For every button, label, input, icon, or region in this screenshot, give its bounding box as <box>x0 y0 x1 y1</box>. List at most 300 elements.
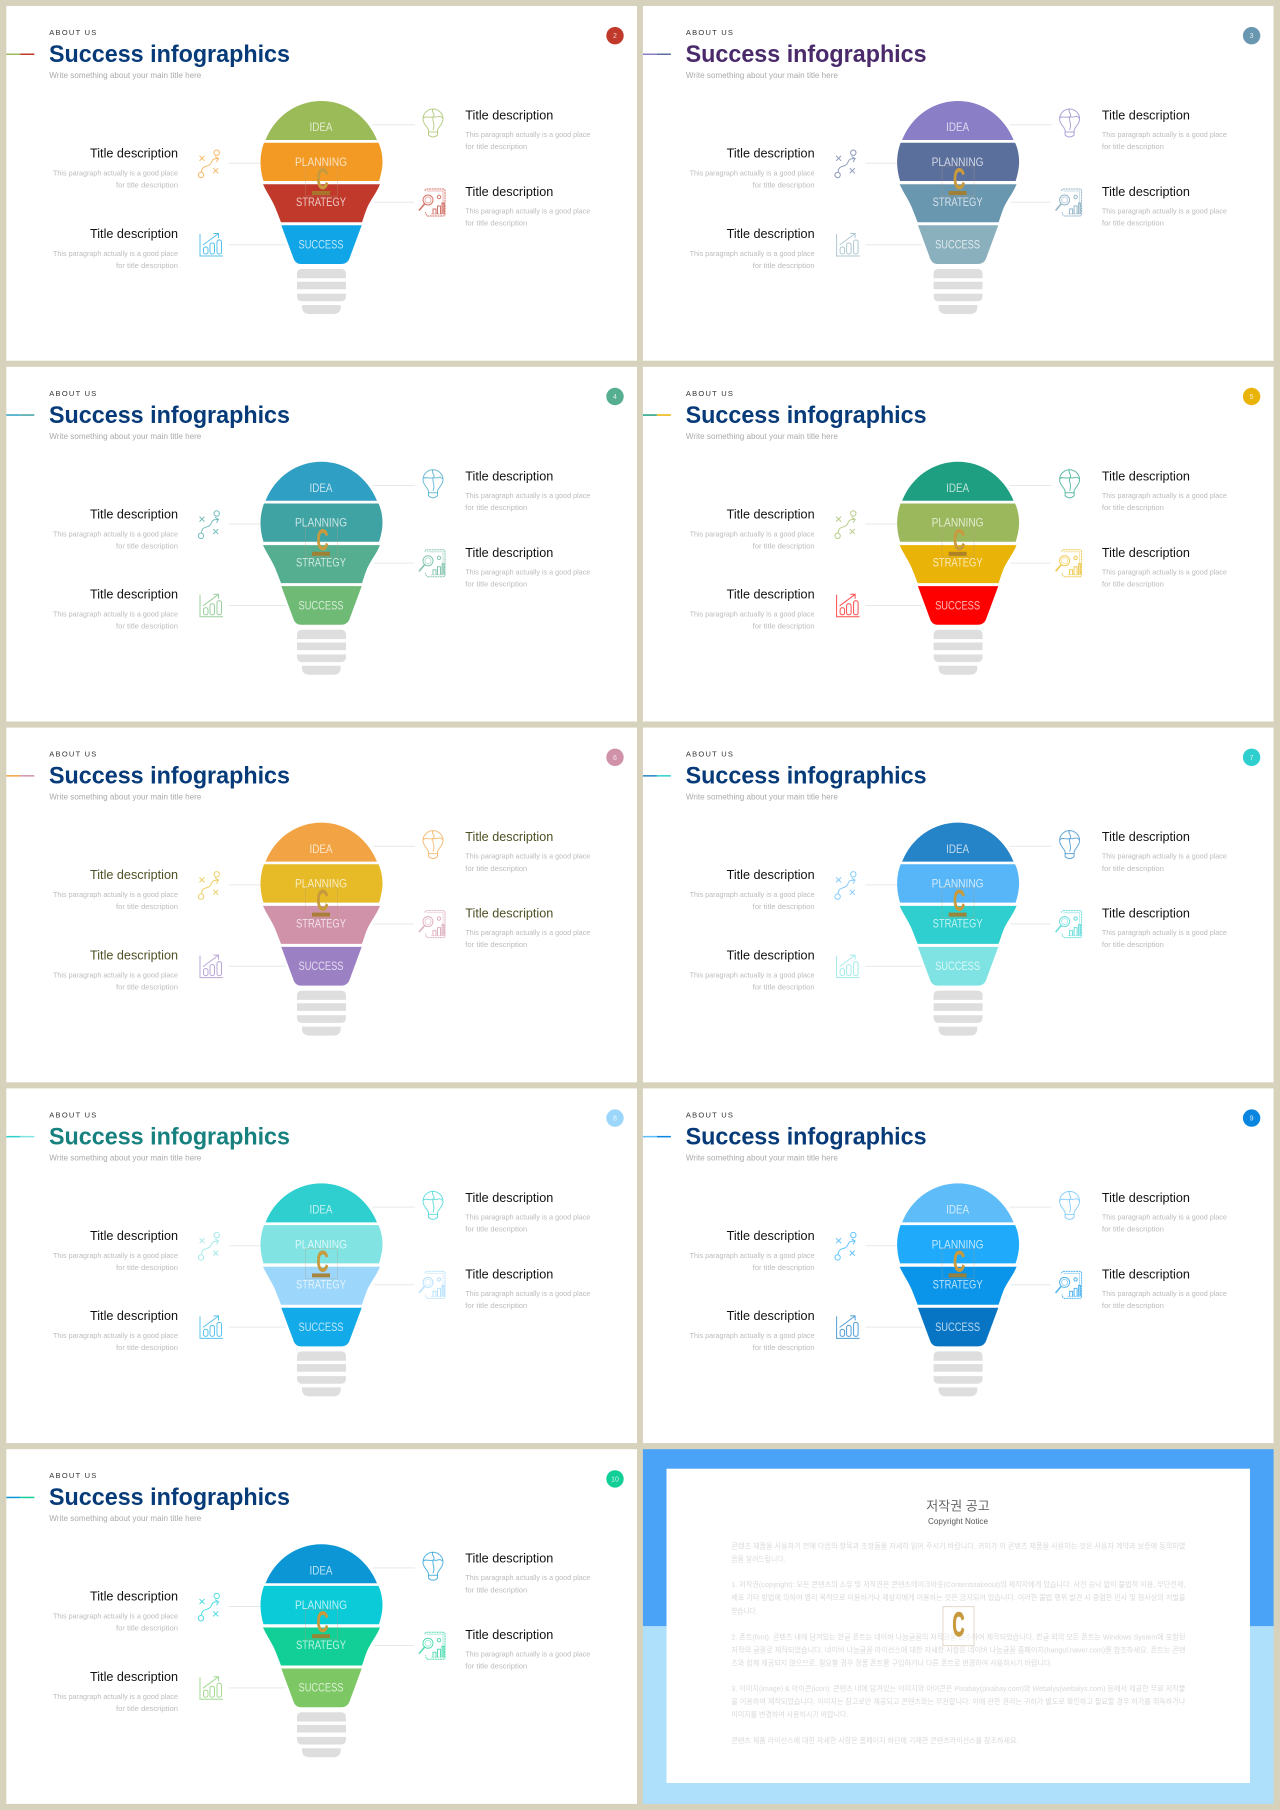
text block: right top: This paragraph actually is a good place <box>465 491 590 500</box>
text block: left top: for title description <box>753 902 815 911</box>
eyebrow: ABOUT US <box>49 28 96 37</box>
labels: IDEA <box>946 1203 969 1217</box>
eyebrow: ABOUT US <box>686 1110 733 1119</box>
icon: strategy play <box>198 150 219 178</box>
text block: left bottom: Title description <box>90 1308 178 1323</box>
bulb base <box>934 1351 983 1396</box>
text block: right top: This paragraph actually is a good place <box>465 130 590 139</box>
text block: left top: for title description <box>116 541 178 550</box>
labels: STRATEGY <box>296 1638 346 1652</box>
text block: right bottom: This paragraph actually is a good place <box>1102 1289 1227 1298</box>
text block: right top: This paragraph actually is a good place <box>1102 491 1227 500</box>
panel: slide 7 <box>643 728 1274 1082</box>
text block: left top <box>53 1589 178 1633</box>
light bulb diagram <box>897 823 1019 1036</box>
text block: left bottom <box>53 947 178 991</box>
panel: slide 4 <box>6 367 637 722</box>
light bulb diagram <box>897 101 1019 314</box>
notice body text: 3. 이미지(image) & 아이콘(icon): 콘텐츠 내에 담겨있는 이미지와 아이콘은 Pixabay(pixabay.com)와 Webalys(webalys.com) 등에서 제공한 무료 저작물 <box>731 1683 1185 1693</box>
watermark: C <box>953 1245 965 1278</box>
page number badge: 4 <box>613 394 617 401</box>
text block: right bottom: for title description <box>465 218 527 228</box>
watermark: C <box>316 885 328 918</box>
text block: left top: This paragraph actually is a good place <box>53 890 178 899</box>
text block: left bottom: for title description <box>753 622 815 631</box>
eyebrow: ABOUT US <box>49 1110 96 1119</box>
text block: left bottom: This paragraph actually is a good place <box>53 249 178 258</box>
labels: PLANNING <box>932 1237 984 1251</box>
watermark: C <box>953 524 965 557</box>
labels: SUCCESS <box>298 1320 344 1334</box>
watermark: C <box>953 163 965 196</box>
labels <box>932 1203 984 1334</box>
accent line <box>6 1497 34 1498</box>
accent line <box>6 414 34 416</box>
text block: right top: for title description <box>465 864 527 873</box>
text block: left top: Title description <box>727 867 815 882</box>
labels <box>295 842 347 973</box>
labels: STRATEGY <box>933 195 983 209</box>
text block: right top <box>1102 468 1227 512</box>
labels: STRATEGY <box>296 1277 346 1291</box>
watermark <box>943 1606 974 1646</box>
icon: strategy play <box>835 150 856 178</box>
icon: strategy play <box>198 1232 219 1260</box>
text block: right top: Title description <box>465 1551 553 1566</box>
page number badge <box>606 1109 624 1127</box>
text block: left top: Title description <box>90 867 178 882</box>
notice body text: 콘텐츠 제품 라이선스에 대한 자세한 사항은 홈페이지 하단에 기재한 콘텐츠라이선스를 참조하세요. <box>731 1735 1018 1745</box>
text block: right top: This paragraph actually is a good place <box>1102 130 1227 139</box>
segment: idea <box>266 101 377 140</box>
panel: copyright notice <box>643 1449 1274 1804</box>
icon: strategy play <box>835 1232 856 1260</box>
text block: right bottom: This paragraph actually is a good place <box>465 928 590 937</box>
icon: report magnifier <box>1056 550 1082 577</box>
watermark: C <box>316 163 328 196</box>
labels: SUCCESS <box>298 959 344 973</box>
notice body text: 저작의 글꼴로 제작되었습니다. 네이버 나눔글꼴 라이선스에 대한 자세한 사항은 네이버 나눔글꼴 홈페이지(hangul.naver.com)를 참조하세요. 폰트는 콘텐 <box>731 1644 1185 1654</box>
text block: left bottom: This paragraph actually is a good place <box>53 610 178 619</box>
text block: left bottom <box>53 587 178 631</box>
watermark <box>306 163 338 196</box>
labels: IDEA <box>310 842 332 856</box>
labels: SUCCESS <box>298 598 344 612</box>
page number badge: 9 <box>1250 1116 1254 1123</box>
segment: idea <box>902 1183 1014 1222</box>
text block: left bottom: This paragraph actually is a good place <box>690 1331 815 1340</box>
title: Success infographics <box>49 402 290 429</box>
labels: IDEA <box>946 842 969 856</box>
eyebrow: ABOUT US <box>49 1471 96 1480</box>
text block: right bottom: Title description <box>1102 1266 1190 1281</box>
eyebrow: ABOUT US <box>686 389 733 398</box>
text block: left top <box>53 506 178 550</box>
text block: left top: for title description <box>116 1263 178 1272</box>
labels: IDEA <box>310 1563 332 1577</box>
text block: right bottom <box>1102 184 1227 228</box>
segment: idea <box>902 462 1014 501</box>
text block: right top <box>465 1551 590 1594</box>
text block: right bottom: Title description <box>1102 184 1190 199</box>
text block: left top: Title description <box>727 506 815 521</box>
text block: right top <box>465 468 590 512</box>
icon: strategy play <box>835 511 856 538</box>
segment: success <box>281 1668 362 1707</box>
subtitle: Write something about your main title here <box>49 1153 202 1162</box>
text block: left top: This paragraph actually is a good place <box>690 168 815 178</box>
segment: strategy <box>263 1628 380 1666</box>
text block: right bottom: Title description <box>465 184 553 199</box>
text block: right bottom <box>1102 1266 1227 1310</box>
text block: right bottom: This paragraph actually is a good place <box>465 567 590 576</box>
text block: right top: This paragraph actually is a good place <box>1102 852 1227 861</box>
text block: left bottom: This paragraph actually is a good place <box>53 1692 178 1701</box>
text block: left bottom <box>690 1308 815 1352</box>
text block: right top: This paragraph actually is a good place <box>465 852 590 861</box>
icon: report magnifier <box>1056 911 1082 938</box>
panel: slide 9 <box>643 1088 1274 1443</box>
subtitle: Write something about your main title here <box>49 71 202 80</box>
text block: right bottom: for title description <box>465 1662 527 1671</box>
text block: right bottom: This paragraph actually is a good place <box>465 206 590 216</box>
labels: STRATEGY <box>933 1277 983 1291</box>
segment: strategy <box>900 184 1017 222</box>
watermark: C <box>316 1606 328 1639</box>
text block: right top: This paragraph actually is a good place <box>465 1212 590 1221</box>
connector lines <box>229 1207 415 1327</box>
text block: right top <box>465 1190 590 1234</box>
text block: right bottom: This paragraph actually is a good place <box>465 1650 590 1659</box>
text block: right bottom: This paragraph actually is a good place <box>1102 567 1227 576</box>
watermark <box>306 524 338 557</box>
labels: STRATEGY <box>296 556 346 570</box>
segment: planning <box>260 143 382 181</box>
connector lines <box>865 846 1052 966</box>
segment: success <box>281 225 362 264</box>
connector lines <box>229 125 415 245</box>
accent line <box>6 1136 34 1137</box>
labels: STRATEGY <box>296 916 346 930</box>
text block: left bottom: Title description <box>90 226 178 241</box>
text block: right top <box>1102 108 1227 151</box>
icon: report magnifier <box>419 911 445 938</box>
labels: PLANNING <box>295 876 347 890</box>
segment: planning <box>260 504 382 542</box>
text block: right bottom: for title description <box>1102 1301 1164 1310</box>
segment: success <box>281 586 362 625</box>
labels <box>932 120 984 252</box>
text block: left bottom <box>53 1308 178 1352</box>
text block: left bottom: Title description <box>727 947 815 962</box>
segment: strategy <box>900 906 1017 944</box>
labels: SUCCESS <box>935 238 980 252</box>
text block: left bottom: for title description <box>753 1343 815 1352</box>
icon: puzzle bulb <box>1060 109 1080 137</box>
watermark <box>942 885 974 918</box>
segment: strategy <box>900 545 1017 583</box>
icon: puzzle bulb <box>1060 470 1080 498</box>
text block: left bottom: This paragraph actually is a good place <box>53 970 178 979</box>
text block: left top: Title description <box>727 146 815 160</box>
light bulb diagram <box>260 1544 382 1757</box>
icon: growth chart <box>837 955 860 978</box>
segment: success <box>918 586 998 625</box>
notice subheading: Copyright Notice <box>928 1516 988 1526</box>
icon: growth chart <box>200 234 223 256</box>
text block: left bottom: for title description <box>116 261 178 270</box>
notice body text: 이미지를 변경하여 사용하시기 바랍니다. <box>731 1709 848 1719</box>
labels: PLANNING <box>295 1598 347 1612</box>
text block: right top: for title description <box>1102 503 1164 512</box>
title: Success infographics <box>49 1484 290 1511</box>
text block: left top: This paragraph actually is a good place <box>53 168 178 178</box>
labels: PLANNING <box>932 155 984 169</box>
text block: left bottom <box>690 226 815 270</box>
notice heading: 저작권 공고 <box>926 1498 990 1514</box>
text block: left top: for title description <box>116 1624 178 1633</box>
accent line <box>643 775 671 777</box>
panel: slide 6 <box>6 728 637 1082</box>
notice body text: 배포 기타 방법에 의하여 영리 목적으로 이용하거나 제삼자에게 이용하는 것은 금지되어 있습니다. 이러한 불법 행위 발견 시 중엄한 민사 및 형사상의 처벌을 <box>731 1592 1185 1602</box>
segment: strategy <box>900 1267 1017 1305</box>
icon: growth chart <box>200 955 223 978</box>
icon: report magnifier <box>419 1271 445 1298</box>
labels <box>932 842 984 973</box>
text block: left top: Title description <box>727 1228 815 1243</box>
accent line <box>6 54 34 55</box>
title: Success infographics <box>49 763 290 790</box>
bulb base <box>934 269 983 314</box>
text block: left top: Title description <box>90 506 178 521</box>
text block: right bottom: for title description <box>1102 940 1164 949</box>
labels: STRATEGY <box>933 556 983 570</box>
subtitle: Write something about your main title here <box>686 793 838 802</box>
panel: slide 3 <box>643 6 1274 361</box>
page number badge <box>1243 749 1260 766</box>
labels: IDEA <box>946 481 969 495</box>
text block: left top <box>53 1228 178 1272</box>
labels: PLANNING <box>295 155 347 169</box>
segment: idea <box>266 462 377 501</box>
notice body text: 콘텐츠 제품을 사용하기 전에 다음의 항목과 조항들을 자세히 읽어 주시기 바랍니다. 귀하가 이 콘텐츠 제품을 사용하는 것은 사용자 계약과 보증에 동의하였 <box>731 1541 1185 1551</box>
text block: right bottom: Title description <box>465 906 553 921</box>
text block: left bottom: for title description <box>753 261 815 270</box>
light bulb diagram <box>260 823 382 1036</box>
text block: left bottom <box>53 226 178 270</box>
text block: left top <box>690 1228 815 1272</box>
icon: growth chart <box>837 594 860 617</box>
text block: left bottom: Title description <box>727 226 815 241</box>
labels <box>295 481 347 612</box>
connector lines <box>229 1568 415 1688</box>
text block: right top: This paragraph actually is a good place <box>1102 1212 1227 1221</box>
page number badge <box>606 1470 624 1488</box>
light bulb diagram <box>260 1183 382 1396</box>
text block: left bottom: Title description <box>90 1669 178 1684</box>
text block: left bottom: for title description <box>753 982 815 991</box>
text block: left bottom <box>690 947 815 991</box>
watermark <box>306 1245 338 1278</box>
page number badge: 10 <box>611 1476 619 1483</box>
icon: puzzle bulb <box>423 831 443 859</box>
text block: left bottom <box>690 587 815 631</box>
segment: planning <box>897 143 1019 181</box>
labels: SUCCESS <box>935 598 980 612</box>
text block: left top: This paragraph actually is a good place <box>53 1612 178 1621</box>
segment: success <box>281 1308 362 1346</box>
watermark: C <box>316 1245 328 1278</box>
text block: right bottom <box>465 906 590 949</box>
labels <box>295 1563 347 1695</box>
text block: left bottom: Title description <box>90 587 178 602</box>
text block: right top: Title description <box>1102 829 1190 844</box>
page number badge: 2 <box>613 33 617 40</box>
text block: left bottom <box>53 1669 178 1713</box>
title: Success infographics <box>686 763 927 790</box>
text block: left bottom: Title description <box>90 947 178 962</box>
page number badge <box>1243 388 1260 405</box>
light bulb diagram <box>897 462 1019 675</box>
text block: left top: for title description <box>753 1263 815 1272</box>
notice body text: 2. 폰트(font): 콘텐츠 내에 담겨있는 한글 폰트는 네이버 나눔글꼴의 저작권을 준수하여 제작되었습니다. 한글 외의 모든 폰트는 Windows System에 포함된 <box>731 1631 1185 1641</box>
labels: IDEA <box>310 120 332 134</box>
text block: right top <box>1102 1190 1227 1234</box>
connector lines <box>865 486 1052 606</box>
labels <box>295 120 347 252</box>
accent line <box>643 54 671 55</box>
text block: right top: for title description <box>1102 1225 1164 1234</box>
segment: idea <box>266 1544 377 1583</box>
labels: IDEA <box>946 120 969 134</box>
text block: right bottom <box>1102 906 1227 949</box>
text block: left bottom: This paragraph actually is a good place <box>690 970 815 979</box>
watermark <box>942 1245 974 1278</box>
icon: strategy play <box>835 872 856 899</box>
text block: left top: This paragraph actually is a good place <box>53 529 178 538</box>
notice body text: 을 이용하여 제작되었습니다. 이미지는 참고로만 제공되고 콘텐츠와는 무관합니다. 이에 관한 권리는 귀하가 별도로 확인하고 필요할 경우 허가를 취득하거나 <box>731 1696 1185 1706</box>
text block: left bottom: This paragraph actually is a good place <box>690 610 815 619</box>
icon: puzzle bulb <box>423 1552 443 1580</box>
segment: planning <box>897 504 1019 542</box>
icon: report magnifier <box>419 189 445 216</box>
subtitle: Write something about your main title here <box>49 793 202 802</box>
icon: strategy play <box>198 1593 219 1621</box>
segment: planning <box>260 864 382 903</box>
connector lines <box>865 1207 1052 1327</box>
icon: report magnifier <box>419 1632 445 1659</box>
labels: SUCCESS <box>935 959 980 973</box>
text block: left bottom: for title description <box>116 982 178 991</box>
title: Success infographics <box>686 402 927 429</box>
text block: left top: This paragraph actually is a good place <box>690 529 815 538</box>
segment: success <box>918 1308 998 1346</box>
labels: IDEA <box>310 481 332 495</box>
notice body text <box>731 1541 1185 1745</box>
icon: report magnifier <box>419 550 445 577</box>
segment: planning <box>897 1225 1019 1263</box>
subtitle: Write something about your main title here <box>49 1514 202 1523</box>
panel: slide 10 <box>6 1449 637 1804</box>
text block: right top: Title description <box>1102 468 1190 483</box>
segment: success <box>281 947 362 986</box>
segment: planning <box>260 1225 382 1263</box>
text block: right bottom: Title description <box>1102 545 1190 560</box>
eyebrow: ABOUT US <box>49 750 96 759</box>
text block: right bottom: This paragraph actually is a good place <box>465 1289 590 1298</box>
text block: left top: for title description <box>116 902 178 911</box>
bulb base <box>297 991 346 1036</box>
text block: right top: Title description <box>1102 108 1190 122</box>
eyebrow: ABOUT US <box>686 750 733 759</box>
text block: right bottom: Title description <box>465 1627 553 1642</box>
notice body text: 받습니다. <box>731 1606 757 1616</box>
bulb base <box>297 1351 346 1396</box>
connector lines <box>229 486 415 606</box>
text block: right top: Title description <box>465 1190 553 1205</box>
segment: success <box>918 947 998 986</box>
segment: success <box>918 225 998 264</box>
text block: left bottom: This paragraph actually is a good place <box>53 1331 178 1340</box>
icon: growth chart <box>200 594 223 617</box>
watermark: C <box>316 524 328 557</box>
text block: left bottom: for title description <box>116 1704 178 1713</box>
text block: right bottom: This paragraph actually is a good place <box>1102 928 1227 937</box>
text block: left top <box>690 867 815 911</box>
bulb base <box>297 630 346 675</box>
eyebrow: ABOUT US <box>686 28 733 37</box>
accent line <box>6 775 34 777</box>
icon: strategy play <box>198 872 219 899</box>
watermark: C <box>952 1606 964 1644</box>
segment: strategy <box>263 184 380 222</box>
icon: growth chart <box>837 1316 860 1338</box>
text block: left bottom: Title description <box>727 1308 815 1323</box>
text block: right top <box>1102 829 1227 873</box>
panel: slide 5 <box>643 367 1274 722</box>
labels <box>932 481 984 612</box>
panel: slide 2 <box>6 6 637 361</box>
page number badge: 8 <box>613 1116 617 1123</box>
text block: left top <box>690 146 815 190</box>
labels: IDEA <box>310 1203 332 1217</box>
notice body text: 음을 알려드립니다. <box>731 1553 785 1563</box>
subtitle: Write something about your main title here <box>686 432 838 441</box>
segment: planning <box>897 864 1019 903</box>
watermark <box>942 163 974 196</box>
text block: right bottom: Title description <box>465 545 553 560</box>
bulb base <box>297 269 346 314</box>
text block: right bottom <box>465 1627 590 1671</box>
text block: right bottom: This paragraph actually is a good place <box>1102 206 1227 216</box>
icon: puzzle bulb <box>1060 831 1080 859</box>
watermark <box>306 885 338 918</box>
icon: puzzle bulb <box>423 1191 443 1219</box>
text block: left top <box>690 506 815 550</box>
watermark: C <box>953 885 965 918</box>
labels: PLANNING <box>932 876 984 890</box>
text block: left top: for title description <box>116 180 178 190</box>
panel: slide 8 <box>6 1088 637 1443</box>
text block: right bottom <box>465 545 590 588</box>
text block: right top: Title description <box>465 468 553 483</box>
text block: left top: for title description <box>753 180 815 190</box>
text block: left top: Title description <box>90 1228 178 1243</box>
page number badge <box>606 749 624 766</box>
text block: right top: for title description <box>465 1225 527 1234</box>
light bulb diagram <box>897 1183 1019 1396</box>
page number badge <box>606 388 624 405</box>
